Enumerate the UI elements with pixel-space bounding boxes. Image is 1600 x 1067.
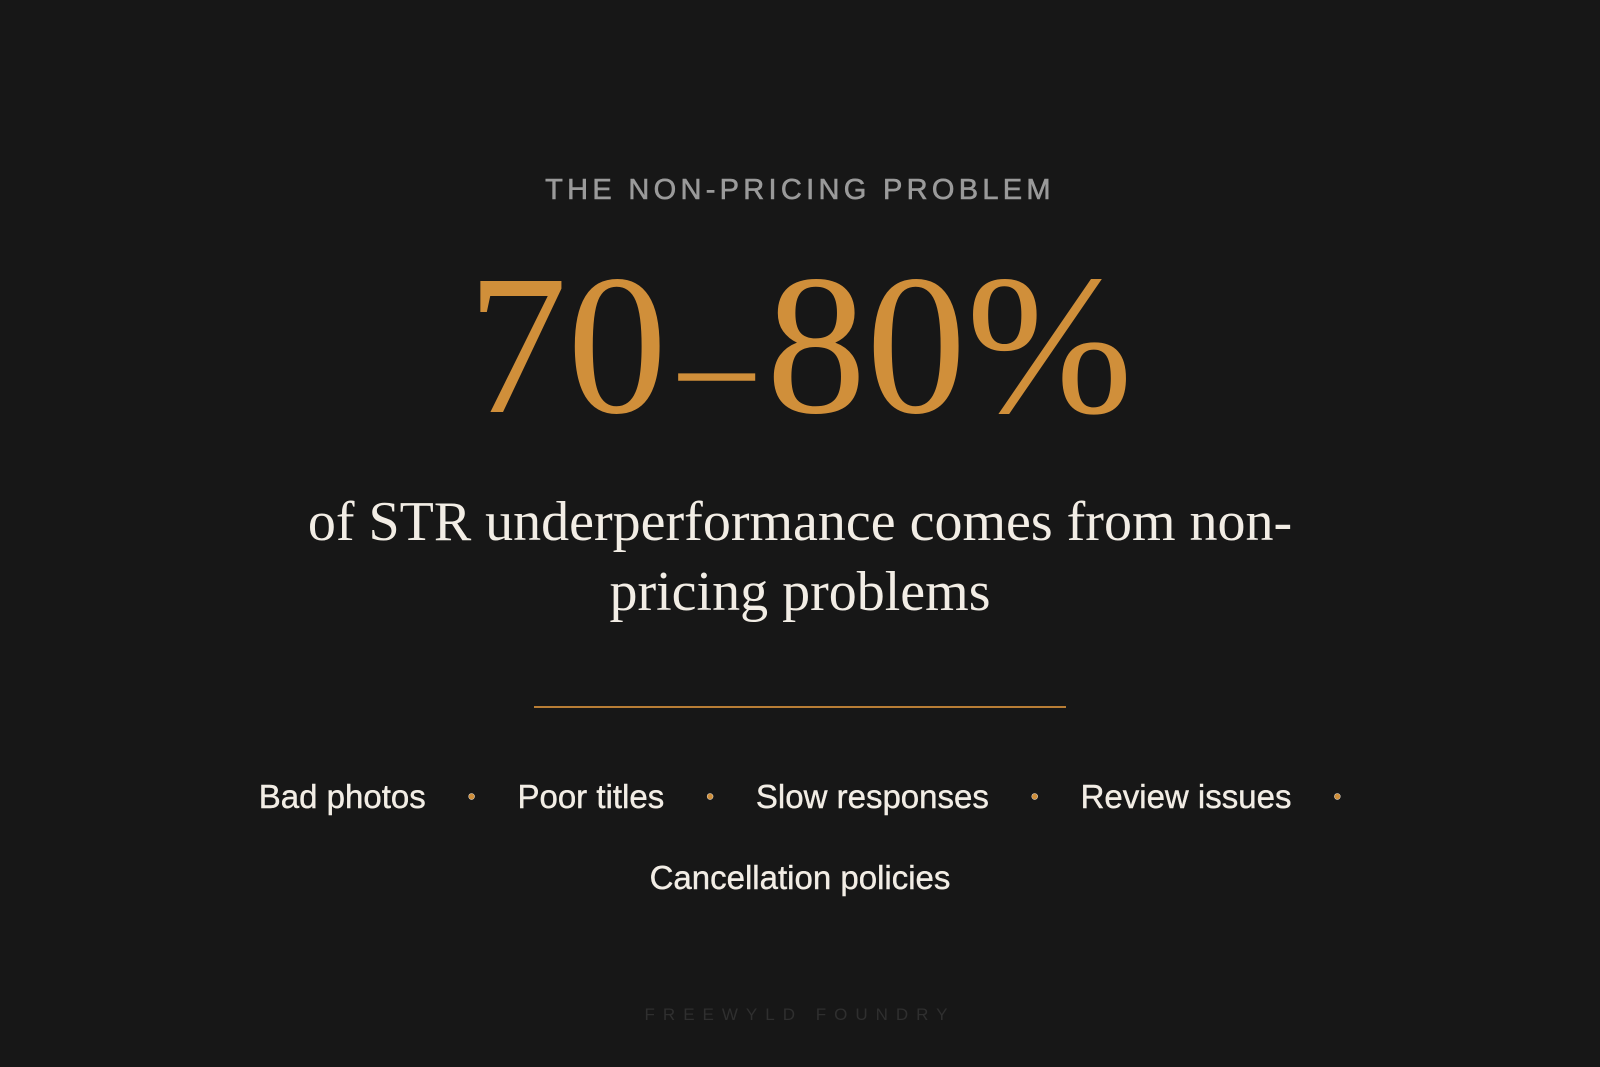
problem list: • — [1031, 784, 1039, 809]
problem list: • — [468, 784, 475, 809]
eyebrow heading: THE NON-PRICING PROBLEM — [545, 174, 1055, 206]
problem list: • — [706, 784, 714, 809]
subtitle: of STR underperformance comes from non-pricing problems — [308, 491, 1292, 623]
big statistic: 70–80% — [467, 235, 1133, 456]
problem list: Review issues — [1081, 778, 1291, 815]
divider — [534, 706, 1066, 708]
problem list: Poor titles — [517, 778, 664, 815]
problem list: Bad photos — [259, 778, 426, 815]
problem list — [259, 778, 1341, 896]
problem list: Slow responses — [756, 778, 989, 815]
problem list: Cancellation policies — [650, 859, 950, 896]
footer brand: FREEWYLD FOUNDRY — [645, 1005, 955, 1024]
problem list: • — [1333, 784, 1341, 809]
